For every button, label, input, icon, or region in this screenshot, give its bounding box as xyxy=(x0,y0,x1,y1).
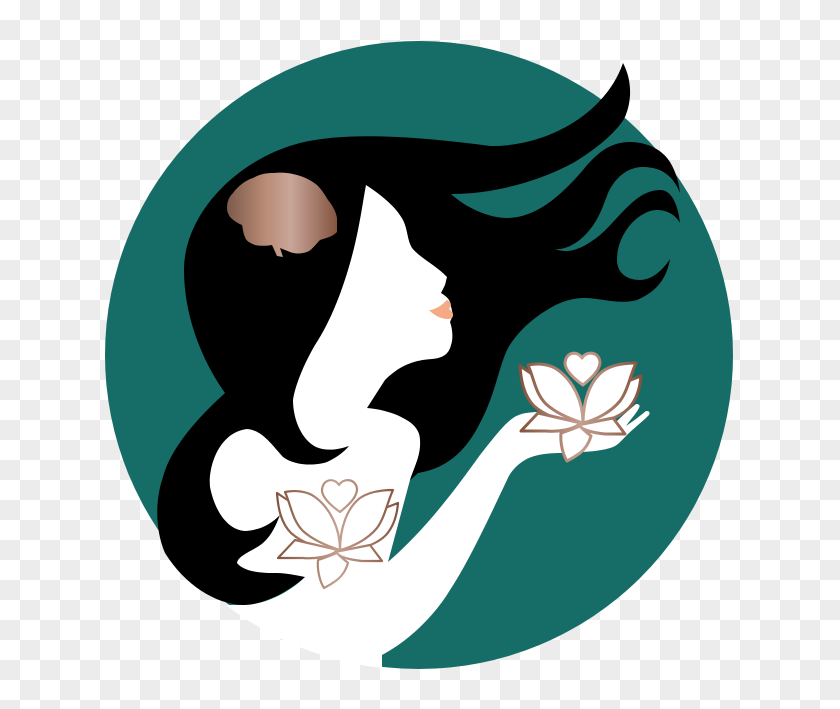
icon: lotus in hand xyxy=(520,353,641,461)
icon: rose gold brain xyxy=(227,173,337,257)
black flowing hair xyxy=(157,63,680,605)
lips xyxy=(429,300,453,319)
teal circle xyxy=(105,41,733,669)
white figure: face, shoulder, arm, hand xyxy=(210,185,650,668)
icon: lotus on chest xyxy=(277,480,398,588)
